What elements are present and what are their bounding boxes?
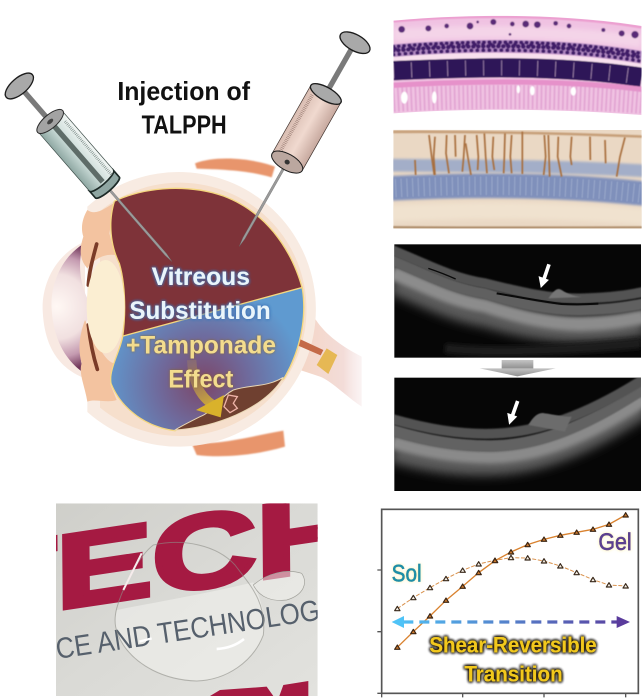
panel: H&E histology <box>393 10 642 117</box>
extraocular muscle bottom <box>192 431 285 456</box>
nuclear layer gaps <box>393 68 642 77</box>
retinal hole outline <box>224 395 237 413</box>
outer retina layers <box>392 388 643 446</box>
barrel <box>272 85 341 171</box>
inner rod <box>48 120 105 184</box>
plunger rod <box>17 84 52 123</box>
label: Shear-Reversible Transition <box>429 633 597 687</box>
blue nuclear band outer <box>378 186 643 195</box>
photoreceptor striations <box>393 97 642 102</box>
label: +Tamponade Effect: +Tamponade <box>126 331 276 359</box>
yellow arrow <box>192 360 224 417</box>
panel: OCT scan after <box>392 378 643 491</box>
deep faded layer <box>392 408 643 467</box>
outer nuclear layer <box>393 68 642 77</box>
plunger disc <box>1 69 38 103</box>
plunger disc <box>337 27 373 58</box>
sub-RPE faint texture <box>445 343 641 351</box>
tan tissue background <box>393 130 642 229</box>
plunger rod <box>324 41 357 95</box>
needle <box>107 187 173 262</box>
blue dot texture <box>378 186 643 195</box>
printed line: science and technology: CE AND TECHNOLOG <box>53 594 322 666</box>
panel: rheology chart <box>377 509 638 697</box>
label: Sol: Sol <box>392 561 422 588</box>
ciliary body bottom <box>79 320 117 402</box>
brown Muller fibres <box>415 132 625 177</box>
barrel <box>38 111 122 201</box>
white arrow <box>508 401 518 424</box>
heading: Injection of TALPPH <box>117 76 250 139</box>
blue nuclear band inner <box>378 165 643 171</box>
inner retina layer <box>392 378 643 434</box>
heading: Injection of TALPPH: TALPPH <box>142 109 227 139</box>
dashed double arrow <box>392 616 630 628</box>
series: gel curve <box>395 513 628 649</box>
eyeball wall <box>87 172 316 447</box>
label: Shear-Reversible Transition: Transition <box>464 662 563 687</box>
extraocular muscle top <box>195 159 275 177</box>
foveal bump <box>548 289 582 298</box>
panel: hydrogel photo <box>56 503 318 696</box>
tick marks <box>280 95 312 152</box>
pink tissue background <box>393 10 642 117</box>
inner nuclear layer <box>393 46 642 57</box>
inner nuclear cells <box>393 42 642 61</box>
label: Vitreous Substitution: Vitreous <box>152 263 250 291</box>
ciliary body top <box>81 203 115 268</box>
barrel end liquid <box>90 171 122 201</box>
chart frame and ticks <box>377 509 638 697</box>
right syringe <box>224 27 374 255</box>
hydrogel droplet outline <box>115 542 305 681</box>
label: +Tamponade Effect <box>126 331 276 394</box>
optic nerve <box>300 313 362 407</box>
top brown edge <box>378 132 643 137</box>
panel: IHC histology <box>378 130 643 229</box>
label: Shear-Reversible Transition: Shear-Reversible <box>429 633 597 658</box>
rod hole <box>46 118 54 125</box>
barrel cap <box>307 80 344 108</box>
tick marks <box>65 121 112 175</box>
bright choroid band <box>392 272 643 324</box>
grey down arrow <box>480 360 556 376</box>
black background <box>394 244 641 358</box>
barrel end <box>268 147 306 178</box>
hydrogel droplet fill <box>115 582 264 681</box>
white arrow <box>539 264 549 287</box>
iris strips <box>88 244 97 369</box>
white card background <box>56 503 318 696</box>
label: Gel: Gel <box>598 529 632 556</box>
foveal bump <box>528 413 572 432</box>
pale plexiform band <box>393 56 642 67</box>
deep faded layer <box>392 285 643 334</box>
outer retina layers <box>392 260 643 310</box>
heading: Injection of TALPPH: Injection of <box>117 76 250 106</box>
retina detachment <box>175 377 283 430</box>
bright choroid band <box>392 398 643 457</box>
cornea and iris <box>43 242 87 378</box>
photoreceptor inner segments <box>393 82 642 89</box>
black background <box>394 378 641 491</box>
optic nerve head <box>297 338 337 374</box>
label: Vitreous Substitution: Substitution <box>129 297 271 325</box>
barrel cap <box>33 106 67 137</box>
series: sol curve <box>395 555 628 611</box>
vitreous: blue tamponade region <box>111 288 303 430</box>
panel: OCT scan before <box>392 244 643 376</box>
left syringe <box>1 69 185 273</box>
vitreous: red region <box>111 189 302 337</box>
panel: eye diagram with syringes <box>1 27 374 456</box>
inner retina layer <box>392 250 643 299</box>
bottom brown edge <box>393 225 642 229</box>
next line of red print <box>210 681 308 696</box>
label: Vitreous Substitution <box>129 263 271 325</box>
subretinal dark lines <box>428 268 598 304</box>
lower pale layer <box>378 211 643 217</box>
label: +Tamponade Effect: Effect <box>168 366 234 394</box>
ganglion cells <box>398 19 639 38</box>
nozzle <box>284 159 291 165</box>
needle <box>238 161 288 247</box>
lens <box>87 260 125 353</box>
vacuoles <box>401 85 576 104</box>
